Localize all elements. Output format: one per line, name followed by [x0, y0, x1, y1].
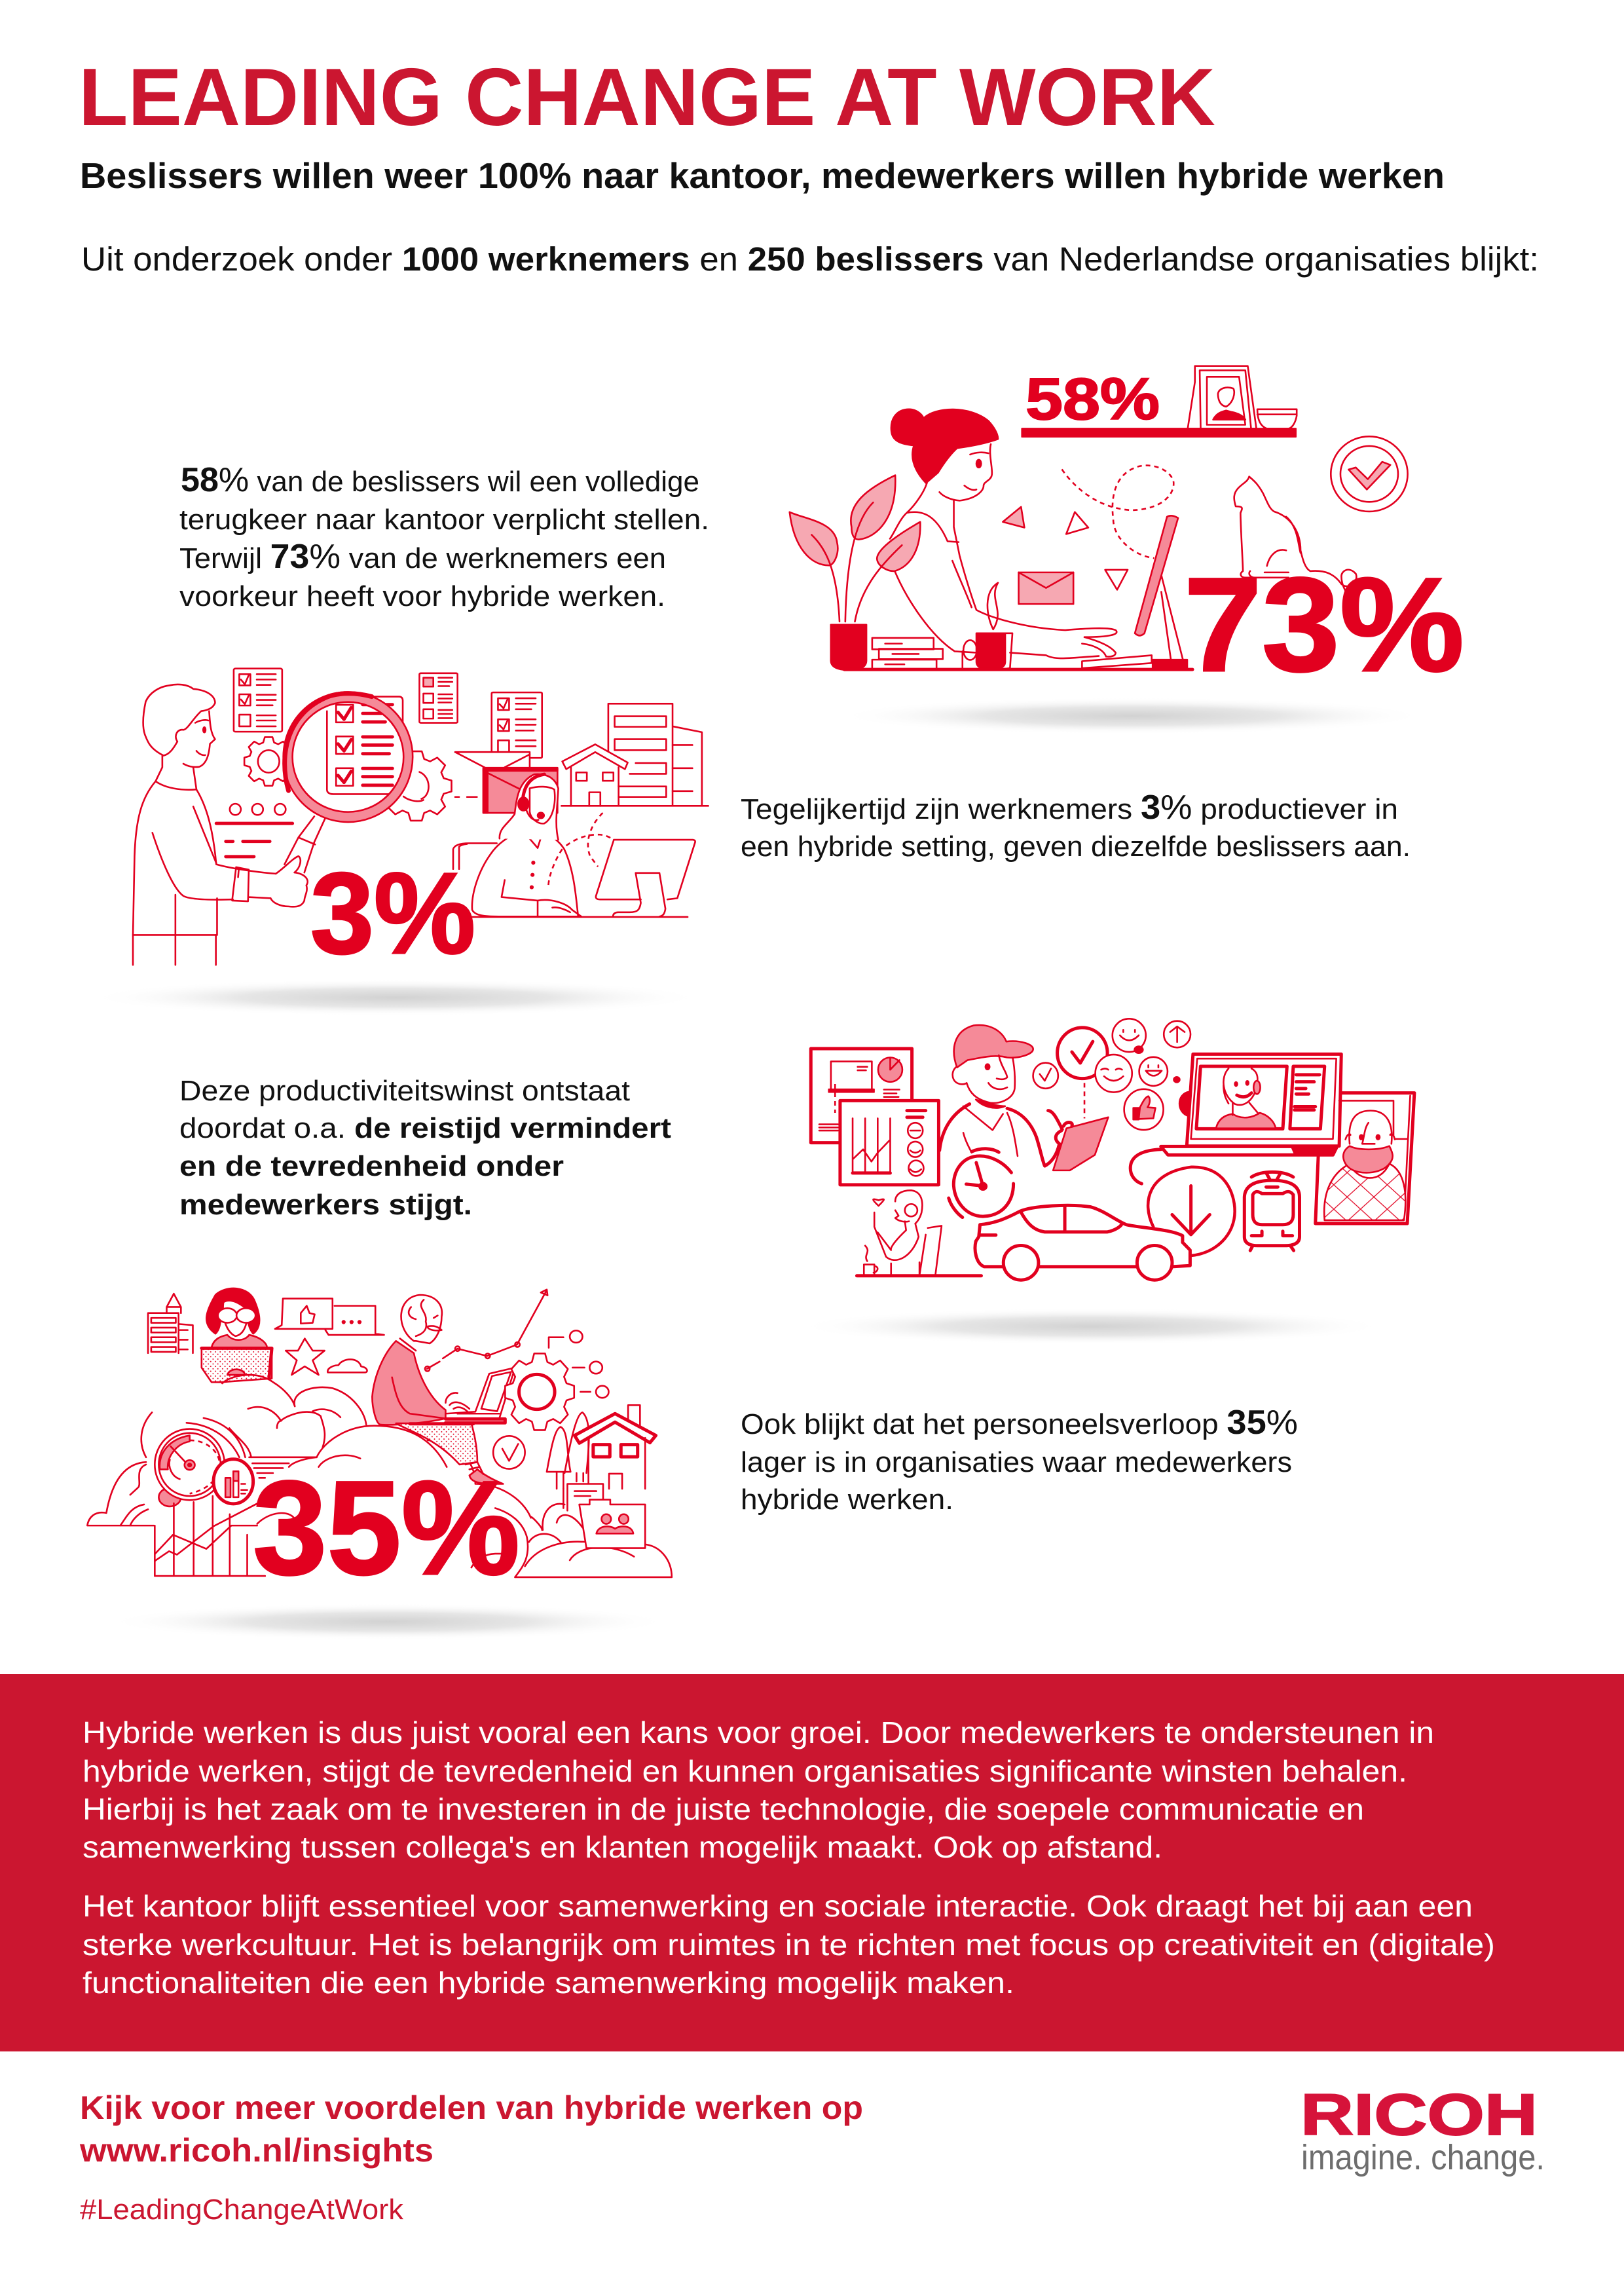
text block: productivity — [741, 789, 1411, 863]
icon: speech bubbles — [275, 1299, 384, 1335]
call to action — [79, 2089, 863, 2169]
text block: travel time: Deze productiviteitswinst ontstaat — [179, 1075, 630, 1107]
icon: small cloud — [327, 1359, 367, 1372]
text block: travel time: doordat o.a. de reistijd vermindert — [179, 1112, 671, 1144]
statistic: 73%: 73% — [1184, 550, 1464, 700]
text block: 58% and 73%: 58% van de beslissers wil een volledige — [181, 461, 699, 499]
icon: office building — [148, 1294, 193, 1353]
clock — [949, 1149, 1014, 1218]
table line — [844, 668, 1192, 671]
text block: personnel turnover: Ook blijkt dat het personeelsverloop 35% — [741, 1404, 1298, 1442]
icon: plant — [790, 476, 920, 670]
technician with cap — [940, 1025, 1060, 1166]
text block: travel time — [179, 1075, 671, 1221]
icon: car — [975, 1205, 1190, 1280]
line chart bottom left — [155, 1496, 267, 1576]
text block: travel time: en de tevredenheid onder — [179, 1150, 564, 1182]
text block: personnel turnover — [741, 1404, 1298, 1516]
icon: envelope — [1019, 572, 1073, 604]
intro text: Uit onderzoek onder 1000 werknemers en 250 beslissers van Nederlandse organisaties blijkt: — [81, 240, 1539, 278]
shadow: illustration 1 — [838, 698, 1427, 734]
icon: left gear — [244, 737, 293, 786]
call to action: www.ricoh.nl/insights — [79, 2132, 434, 2169]
icon: magnifying glass — [284, 692, 413, 872]
text block: office remains essential: functionaliteiten die een hybride samenwerking mogelijk maken. — [83, 1966, 1014, 2000]
text block: 58% and 73%: terugkeer naar kantoor verplicht stellen. — [179, 504, 709, 536]
icon: right gear — [381, 751, 452, 821]
icon: tram — [1244, 1172, 1299, 1250]
house and buildings — [561, 703, 709, 806]
text block: hybrid work as opportunity: samenwerking tussen collega's en klanten mogelijk maakt. Ook op afstand. — [83, 1830, 1162, 1864]
shadow: illustration 3 — [796, 1308, 1386, 1345]
logo: Ricoh: RICOH — [1301, 2082, 1538, 2147]
icon: coffee mug — [963, 583, 1012, 669]
woman with glasses and laptop — [202, 1288, 272, 1382]
icon: cat — [1234, 477, 1356, 598]
shadow: illustration 4 — [107, 1603, 670, 1640]
icon: speedometer — [155, 1418, 253, 1506]
illustration: clouds, people, gauge and house — [87, 1288, 672, 1577]
statistic: 3%: 3% — [310, 850, 475, 978]
shadow: illustration 2 — [88, 979, 703, 1016]
text panel lines — [216, 804, 293, 857]
text block: productivity: Tegelijkertijd zijn werknemers 3% productiever in — [741, 789, 1398, 827]
icon: folder and document — [563, 1484, 645, 1548]
icon: small checklist — [419, 673, 458, 723]
illustration: technician, car, video call — [811, 1019, 1414, 1280]
clipboard — [1048, 1111, 1108, 1170]
old man with laptop — [372, 1295, 515, 1484]
illustration: man with magnifier and office worker — [133, 669, 709, 965]
woman figure — [890, 409, 1116, 658]
logo: Ricoh: imagine. change. — [1301, 2138, 1545, 2177]
shelf with frame and bowl — [1022, 366, 1297, 437]
report cards — [811, 1049, 938, 1185]
text block: 58% and 73%: voorkeur heeft voor hybride werken. — [179, 580, 665, 612]
man figure — [133, 684, 308, 965]
text block: hybrid work as opportunity — [83, 1715, 1434, 1864]
monitor and desk — [459, 840, 695, 917]
clouds — [87, 1375, 672, 1577]
icon: down arrow circle — [1148, 1167, 1235, 1256]
icon: third checklist — [492, 692, 542, 758]
text block: productivity: een hybride setting, geven diezelfde beslissers aan. — [741, 831, 1411, 863]
icon: star — [286, 1339, 325, 1375]
call to action: Kijk voor meer voordelen van hybride werken op — [80, 2089, 863, 2126]
laptop video call — [1130, 1054, 1341, 1184]
icon: floating triangles — [1003, 507, 1024, 527]
person with headphones — [857, 1190, 981, 1276]
hashtag: #LeadingChangeAtWork — [80, 2194, 404, 2226]
books — [872, 638, 943, 669]
statistic: 35%: 35% — [253, 1453, 520, 1603]
text block: personnel turnover: hybride werken. — [741, 1484, 953, 1516]
text block: personnel turnover: lager is in organisaties waar medewerkers — [741, 1446, 1292, 1478]
icon: check badge — [1331, 436, 1408, 512]
icon: check — [493, 1436, 525, 1469]
title: LEADING CHANGE AT WORK — [79, 52, 1215, 143]
text block: hybrid work as opportunity: Hierbij is het zaak om te investeren in de juiste technologie, die soepele communicatie en — [83, 1792, 1364, 1826]
text block: hybrid work as opportunity: Hybride werken is dus juist vooral een kans voor groei. Door medewerkers te ondersteunen in — [83, 1715, 1434, 1749]
monitor — [1082, 515, 1187, 670]
panel: red conclusion band — [0, 1674, 1624, 2051]
text block: office remains essential: Het kantoor blijft essentieel voor samenwerking en sociale interactie. Ook draagt het bij aan een — [83, 1889, 1473, 1923]
illustration: woman at desk with cat — [790, 366, 1408, 670]
icon: gear with nodes — [505, 1330, 608, 1430]
text block: office remains essential — [83, 1889, 1495, 2000]
trees and house — [547, 1405, 656, 1542]
text block: travel time: medewerkers stijgt. — [179, 1189, 472, 1221]
logo: Ricoh — [1301, 2082, 1545, 2177]
tablet with bearded man — [1316, 1093, 1414, 1224]
text block: 58% and 73%: Terwijl 73% van de werknemers een — [179, 538, 666, 576]
icons: check marks and smileys — [1033, 1019, 1190, 1130]
icon: checklist — [234, 669, 282, 732]
text block: office remains essential: sterke werkcultuur. Het is belangrijk om ruimtes in te richten met focus op creativiteit en (digitale) — [83, 1928, 1495, 1962]
worker with headset — [453, 774, 614, 916]
line graph — [425, 1290, 547, 1372]
statistic: 58%: 58% — [1025, 367, 1160, 432]
icon: envelopes — [455, 752, 557, 813]
subtitle: Beslissers willen weer 100% naar kantoor, medewerkers willen hybride werken — [80, 155, 1445, 196]
text block: 58% and 73% — [179, 461, 709, 612]
text block: hybrid work as opportunity: hybride werken, stijgt de tevredenheid en kunnen organisaties significante winsten behalen. — [83, 1754, 1407, 1788]
dashed path — [1062, 466, 1173, 558]
